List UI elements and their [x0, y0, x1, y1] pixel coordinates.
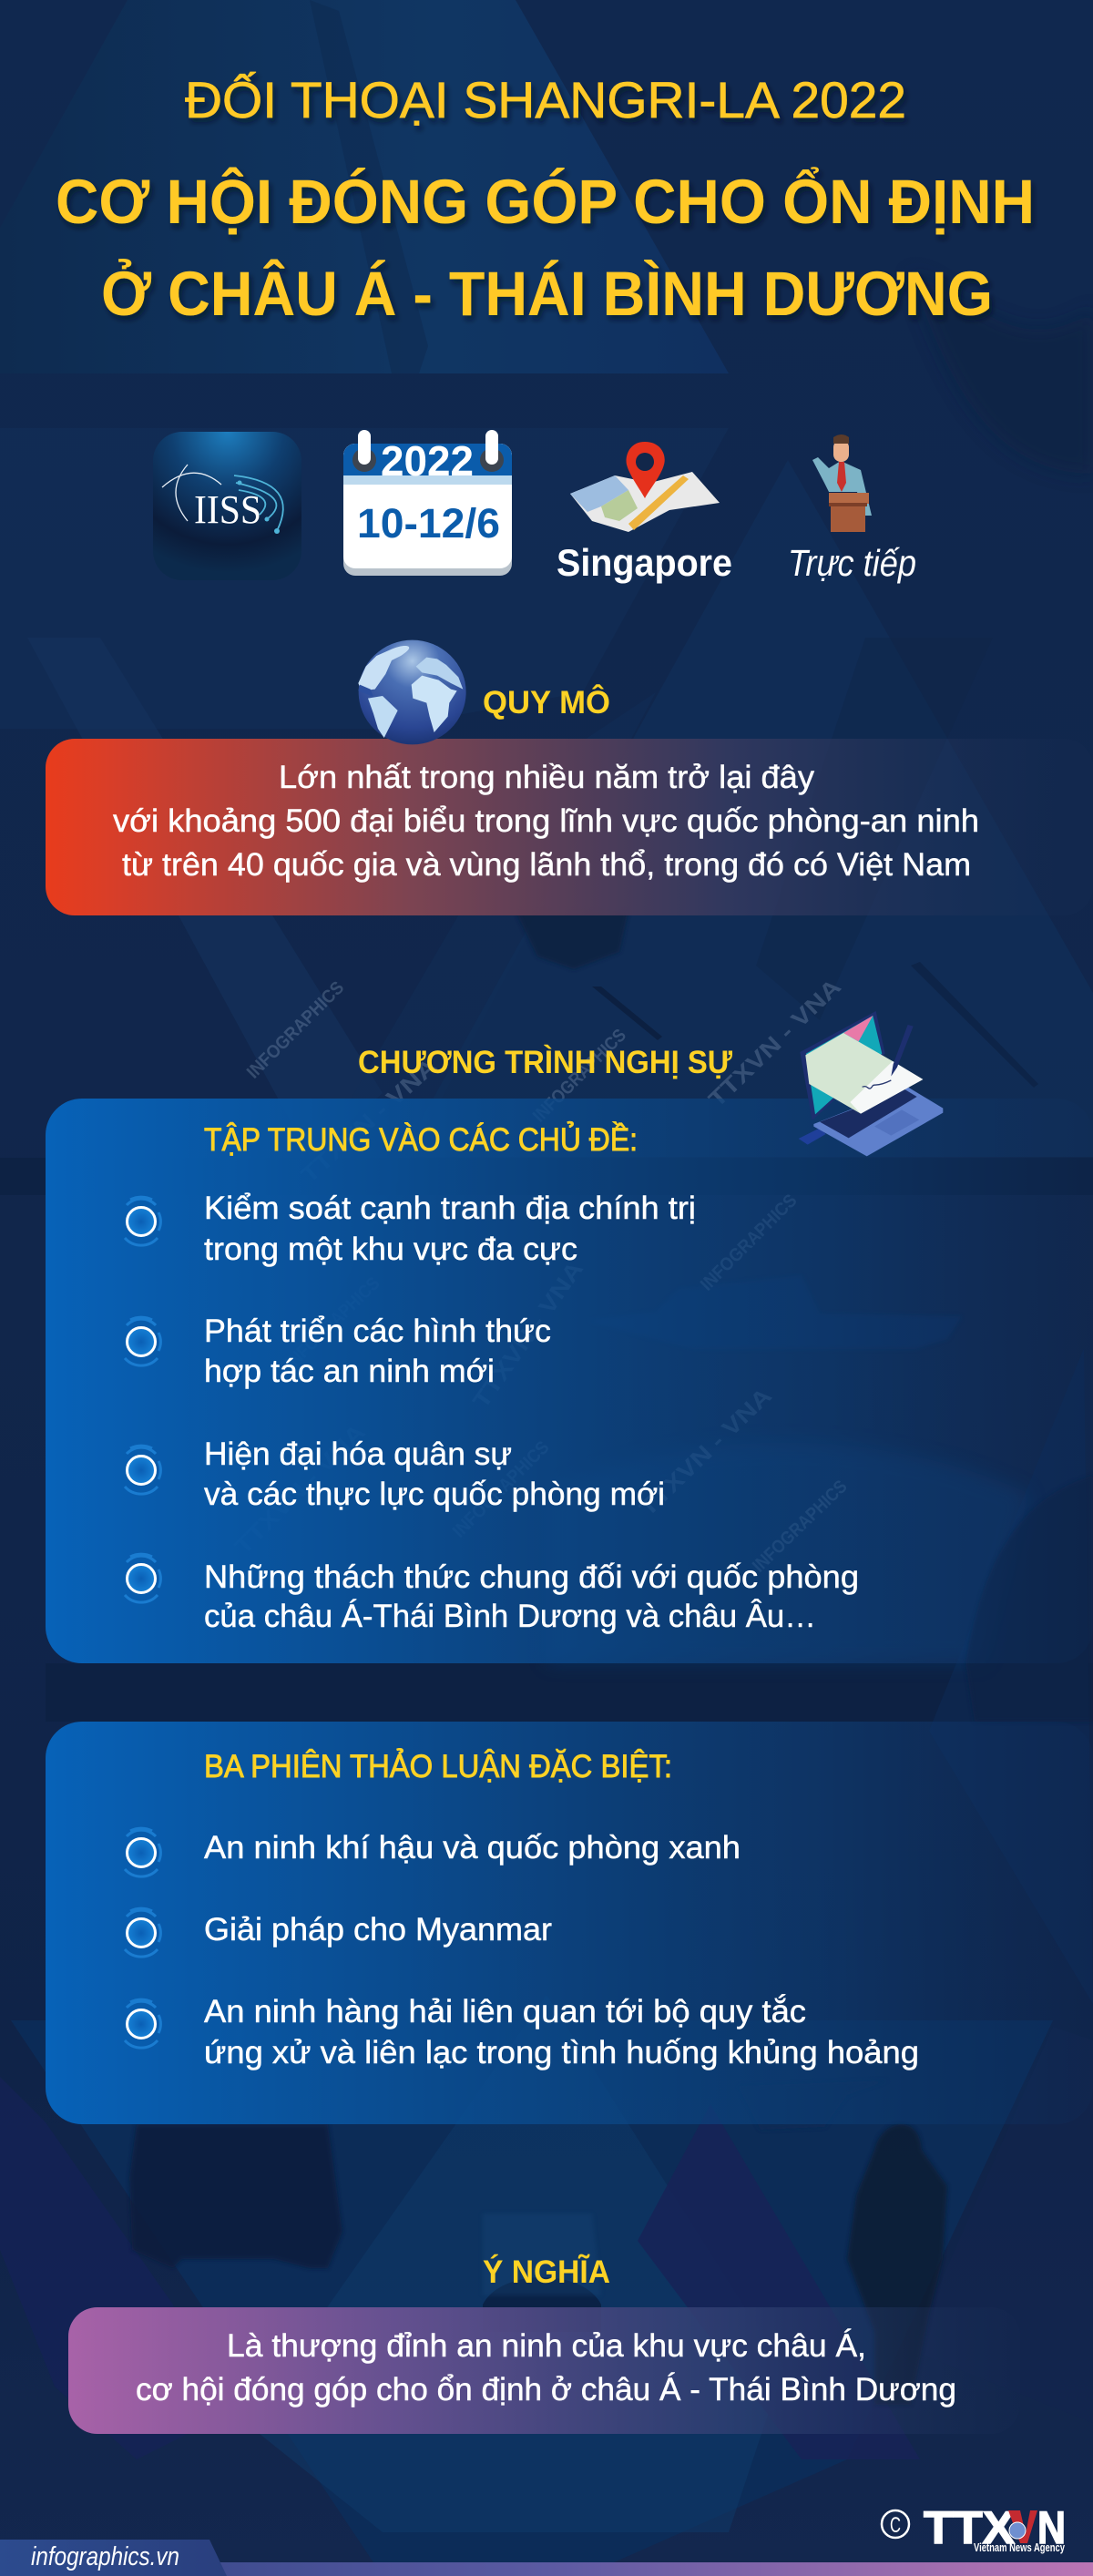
session 2: Giải pháp cho Myanmar	[204, 1912, 552, 1947]
icon: map with pin	[570, 442, 720, 532]
watermarks: TTXVN - VNA	[296, 1054, 442, 1188]
panel: significance	[68, 2307, 1020, 2434]
sessions heading: BA PHIÊN THẢO LUẬN ĐẶC BIỆT:	[204, 1748, 672, 1784]
session 1: An ninh khí hậu và quốc phòng xanh	[204, 1830, 741, 1866]
sessions box	[46, 1722, 1093, 2124]
watermarks: INFOGRAPHICS	[749, 1477, 852, 1577]
scale body text: Lớn nhất trong nhiều năm trở lại đây	[279, 760, 815, 795]
topic 2	[125, 1314, 551, 1389]
icon: speaker at podium	[812, 434, 872, 532]
logo: TTXVN: TTX	[924, 2502, 1015, 2553]
icon: IISS logo: IISS	[194, 487, 261, 532]
scale box	[46, 739, 1093, 915]
watermarks: TTXVN - VNA	[635, 1383, 777, 1521]
topics box	[46, 1099, 1093, 1663]
topic 2: hợp tác an ninh mới	[204, 1354, 495, 1389]
session 3: An ninh hàng hải liên quan tới bộ quy tắc	[204, 1994, 806, 2029]
logo: TTXVN: C	[890, 2513, 901, 2538]
watermarks: TTXVN - VNA	[230, 1419, 371, 1559]
topic 3	[125, 1436, 665, 1512]
heading: QUY MÔ: QUY MÔ	[483, 684, 610, 721]
label: Singapore: Singapore	[557, 541, 732, 584]
icon: calendar	[343, 430, 512, 576]
title line 2: CƠ HỘI ĐÓNG GÓP CHO ỔN ĐỊNH	[56, 167, 1035, 237]
heading: agenda: CHƯƠNG TRÌNH NGHỊ SỰ	[358, 1044, 733, 1080]
icon: laptop with signed document	[799, 1011, 943, 1156]
title line 1: ĐỐI THOẠI SHANGRI-LA 2022	[185, 71, 906, 128]
session 3	[125, 1994, 919, 2070]
title line 3: Ở CHÂU Á - THÁI BÌNH DƯƠNG	[101, 259, 993, 329]
scale body text: với khoảng 500 đại biểu trong lĩnh vực quốc phòng-an ninh	[113, 803, 979, 839]
scale body text	[113, 760, 979, 883]
watermarks	[230, 974, 852, 1577]
watermarks: INFOGRAPHICS	[529, 1026, 630, 1127]
watermarks: INFOGRAPHICS	[449, 1437, 554, 1542]
heading: Ý NGHĨA: Ý NGHĨA	[483, 2254, 610, 2290]
calendar dates: 10-12/6	[357, 500, 500, 547]
topic 4: của châu Á-Thái Bình Dương và châu Âu…	[204, 1599, 816, 1634]
title	[56, 71, 1035, 329]
icon: IISS logo	[153, 432, 301, 580]
significance text: cơ hội đóng góp cho ổn định ở châu Á - Thái Bình Dương	[136, 2372, 956, 2407]
topic 1	[125, 1191, 696, 1267]
topic 4	[125, 1554, 859, 1634]
watermarks: TTXVN - VNA	[704, 974, 846, 1112]
footer tab: infographics.vn: infographics.vn	[31, 2542, 179, 2571]
label: Trực tiếp: Trực tiếp	[788, 542, 916, 584]
watermarks: INFOGRAPHICS	[243, 977, 348, 1083]
logo: TTXVN	[882, 2502, 1066, 2554]
topic 1: trong một khu vực đa cực	[204, 1232, 577, 1267]
watermarks: INFOGRAPHICS	[281, 1273, 384, 1374]
footer strip	[0, 2562, 1093, 2576]
topic 1: Kiểm soát cạnh tranh địa chính trị	[204, 1191, 696, 1226]
calendar year: 2022	[381, 437, 474, 485]
watermarks: TTXVN - VNA	[468, 1257, 588, 1413]
panel: agenda topics	[46, 1099, 1093, 1663]
significance box	[68, 2307, 1020, 2434]
topic 3: Hiện đại hóa quân sự	[204, 1436, 512, 1472]
scale body text: từ trên 40 quốc gia và vùng lãnh thổ, trong đó có Việt Nam	[122, 847, 971, 883]
session 2	[125, 1908, 552, 1957]
topic 3: và các thực lực quốc phòng mới	[204, 1477, 665, 1512]
topic 2: Phát triển các hình thức	[204, 1314, 551, 1349]
footer tab: infographics.vn	[0, 2540, 227, 2576]
session 3: ứng xử và liên lạc trong tình huống khủng hoảng	[204, 2035, 919, 2070]
topic 4: Những thách thức chung đối với quốc phòng	[204, 1559, 859, 1595]
panel: special sessions	[46, 1722, 1093, 2124]
panel: scale	[46, 739, 1093, 915]
icon: globe	[358, 640, 466, 744]
topics heading: TẬP TRUNG VÀO CÁC CHỦ ĐỀ:	[204, 1121, 638, 1158]
session 1	[125, 1828, 741, 1876]
significance text: Là thượng đỉnh an ninh của khu vực châu Á,	[227, 2328, 866, 2364]
logo: TTXVN: N	[1037, 2502, 1066, 2553]
watermarks: INFOGRAPHICS	[697, 1191, 802, 1295]
significance text	[136, 2328, 956, 2407]
